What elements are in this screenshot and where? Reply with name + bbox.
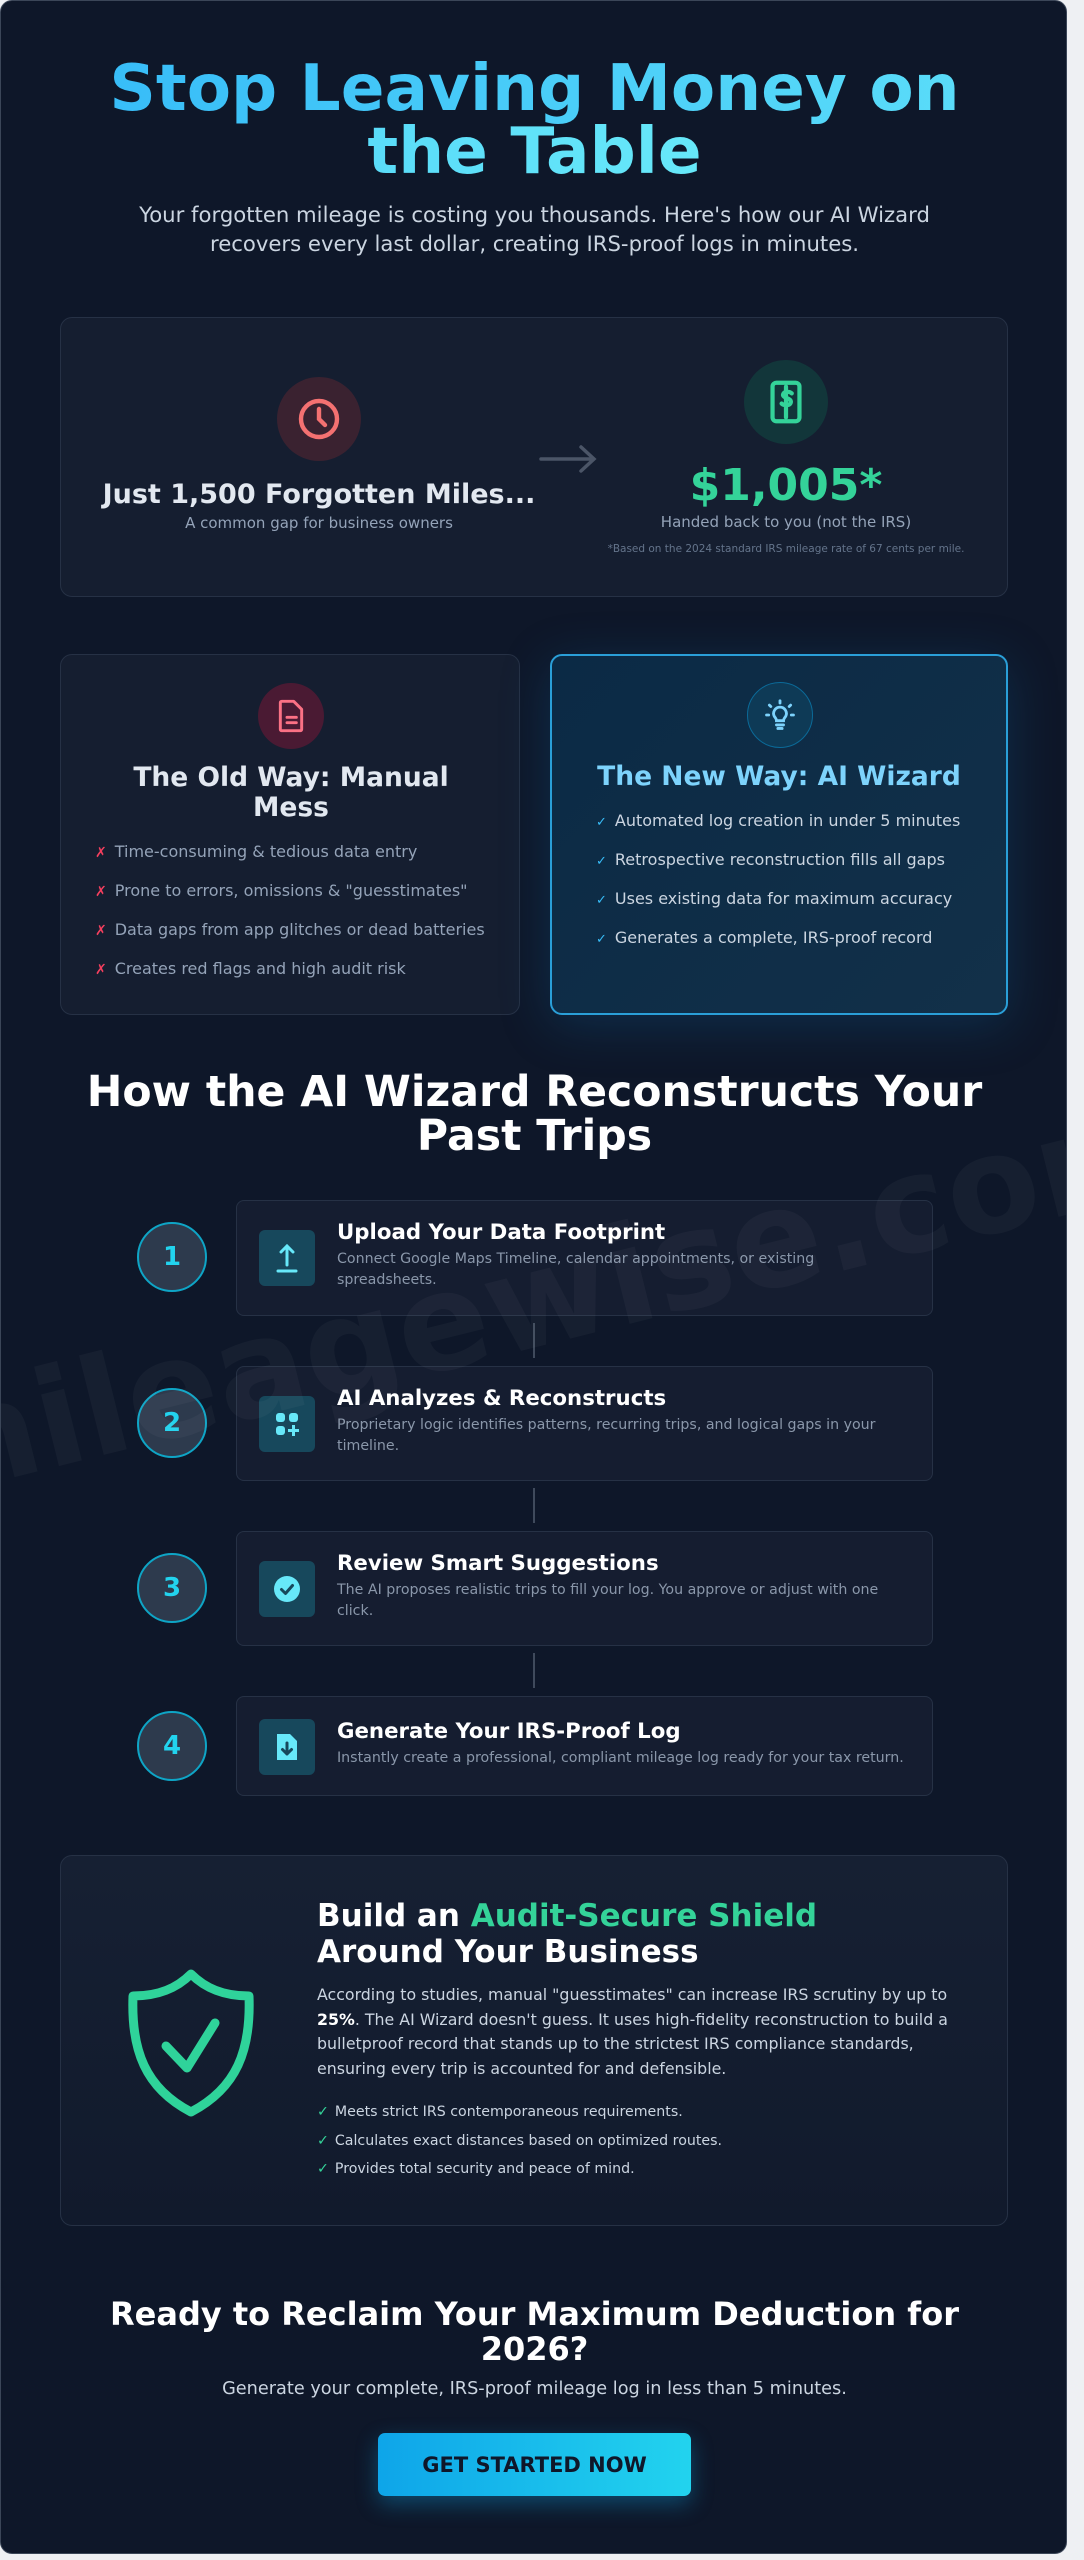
- list: old way problems: ✗ Data gaps from app glitches or dead batteries: [95, 920, 485, 939]
- panel: old way: [60, 654, 520, 1015]
- stat: recovered amount: [608, 460, 964, 555]
- step number 4: 4: [163, 1731, 181, 1761]
- step 4: [137, 1696, 933, 1796]
- connector: [533, 1653, 535, 1688]
- step card 2: [236, 1366, 933, 1481]
- connector: [533, 1323, 535, 1358]
- checklist: ✓ Meets strict IRS contemporaneous requirements.: [317, 2104, 683, 2120]
- stat: forgotten miles: A common gap for business owners: [185, 514, 453, 532]
- list: benefits: [596, 811, 960, 947]
- list: benefits: ✓ Retrospective reconstruction fills all gaps: [596, 850, 945, 869]
- CTA heading: 2026?: [481, 2330, 588, 2368]
- checklist: ✓ Provides total security and peace of mind.: [317, 2161, 635, 2177]
- heading: Mess: [253, 792, 329, 823]
- step card 3: [236, 1531, 933, 1646]
- list: old way problems: ✗ Time-consuming & tedious data entry: [95, 842, 417, 861]
- icon: grid: [259, 1396, 315, 1452]
- CTA button: [378, 2433, 691, 2496]
- CTA heading: Ready to Reclaim Your Maximum Deduction for: [110, 2295, 959, 2333]
- stat: forgotten miles: Just 1,500 Forgotten Miles...: [103, 479, 535, 510]
- icon: lightbulb: [747, 682, 813, 748]
- icon: check circle: [259, 1561, 315, 1617]
- section heading: how it works: [87, 1067, 982, 1161]
- subtitle: Your forgotten mileage is costing you thousands. Here's how our AI Wizard recovers every last dollar, creating IRS-proof logs in minutes.: [139, 202, 930, 256]
- step 3: [137, 1531, 933, 1646]
- heading: Around Your Business: [317, 1934, 699, 1970]
- step card 4: Generate Your IRS-Proof Log: [337, 1719, 681, 1744]
- panel: audit shield: [60, 1855, 1008, 2226]
- step card 3: The AI proposes realistic trips to fill your log. You approve or adjust with one click.: [337, 1582, 878, 1619]
- title: [109, 51, 960, 189]
- list: old way problems: ✗ Creates red flags and high audit risk: [95, 959, 406, 978]
- section heading: how it works: How the AI Wizard Reconstructs Your: [87, 1067, 982, 1117]
- icon: upload: [259, 1230, 315, 1286]
- heading: The New Way: AI Wizard: [597, 761, 961, 792]
- step card 2: Proprietary logic identifies patterns, recurring trips, and logical gaps in your timeline.: [337, 1417, 876, 1454]
- heading: The Old Way: Manual: [133, 762, 449, 793]
- step card 4: [236, 1696, 933, 1796]
- stat: recovered amount: *Based on the 2024 standard IRS mileage rate of 67 cents per mile.: [608, 543, 964, 555]
- list: old way problems: [95, 842, 485, 978]
- step card 1: Connect Google Maps Timeline, calendar appointments, or existing spreadsheets.: [337, 1251, 814, 1288]
- CTA subtext: Generate your complete, IRS-proof mileage log in less than 5 minutes.: [222, 2379, 847, 2399]
- arrow: [539, 445, 596, 473]
- stat: recovered amount: $1,005*: [690, 460, 882, 511]
- step number 4: [137, 1711, 207, 1781]
- step card 3: Review Smart Suggestions: [337, 1551, 659, 1576]
- CTA heading: [110, 2295, 959, 2368]
- connector: [533, 1488, 535, 1523]
- icon: shield: [128, 1970, 254, 2116]
- step number 1: 1: [163, 1242, 181, 1272]
- step number 2: 2: [163, 1408, 181, 1438]
- heading: [317, 1898, 817, 1970]
- icon: document: [258, 683, 324, 749]
- checklist: [317, 2104, 722, 2177]
- step card 4: Instantly create a professional, compliant mileage log ready for your tax return.: [337, 1750, 904, 1766]
- title: the Table: [367, 114, 702, 189]
- step card 1: [236, 1200, 933, 1316]
- CTA button: GET STARTED NOW: [422, 2452, 647, 2476]
- paragraph: According to studies, manual "guesstimates" can increase IRS scrutiny by up to 25%. The AI Wizard doesn't guess. It uses high-fidelity reconstruction to build a bulletproof record that stands up to the strictest IRS compliance standards, ensuring every trip is accounted for and defensible.: [317, 1985, 948, 2078]
- list: benefits: ✓ Generates a complete, IRS-proof record: [596, 928, 932, 947]
- step number 3: [137, 1553, 207, 1623]
- heading: [133, 762, 449, 823]
- icon: dollar: [744, 360, 828, 444]
- title: Stop Leaving Money on: [109, 51, 960, 126]
- icon: file download: [259, 1719, 315, 1775]
- icon: clock: [277, 377, 361, 461]
- list: benefits: ✓ Automated log creation in under 5 minutes: [596, 811, 960, 830]
- list: old way problems: ✗ Prone to errors, omissions & "guesstimates": [95, 881, 468, 900]
- stat: forgotten miles: [101, 479, 535, 532]
- step card 1: Upload Your Data Footprint: [337, 1220, 665, 1245]
- step 1: [137, 1200, 933, 1316]
- step number 2: [137, 1388, 207, 1458]
- list: benefits: ✓ Uses existing data for maximum accuracy: [596, 889, 952, 908]
- checklist: ✓ Calculates exact distances based on optimized routes.: [317, 2133, 722, 2149]
- step number 3: 3: [163, 1573, 181, 1603]
- panel: stats: [60, 317, 1008, 597]
- heading: Build an Audit-Secure Shield: [317, 1898, 817, 1934]
- panel: new way: [550, 654, 1008, 1015]
- step card 2: AI Analyzes & Reconstructs: [337, 1386, 666, 1411]
- step number 1: [137, 1222, 207, 1292]
- section heading: how it works: Past Trips: [417, 1111, 652, 1161]
- step 2: [137, 1366, 933, 1481]
- stat: recovered amount: Handed back to you (not the IRS): [661, 513, 911, 531]
